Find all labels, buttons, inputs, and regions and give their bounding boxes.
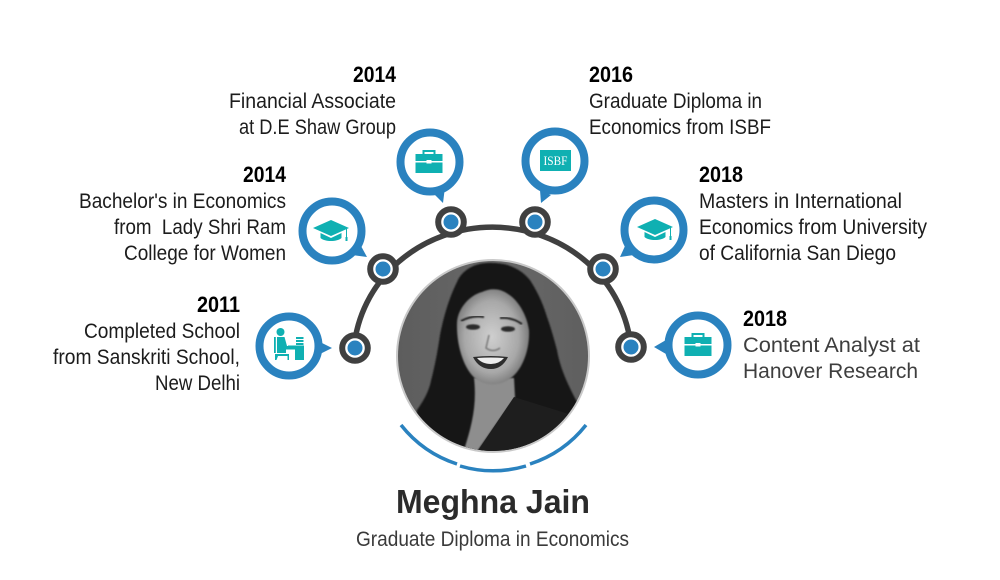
name heading: Meghna Jain [396,483,590,520]
text: 2016 diploma: Economics from ISBF [589,115,771,139]
text: 2018 analyst: Content Analyst at [743,334,920,357]
text: 2011 school: New Delhi [155,371,240,395]
text: 2014 associate [229,62,397,139]
icon bubble: graduation cap left [302,202,367,260]
icon bubble: briefcase left [400,132,460,203]
portrait photo [396,259,590,453]
node: 2011 [342,335,368,361]
node: 2014 associate [438,209,464,235]
icon bubble: ISBF logo [526,132,584,203]
text: 2018 analyst [743,306,920,383]
timeline arc [354,227,631,348]
text: 2011 school: Completed School [84,319,240,343]
text: 2014 bachelor's: 2014 [243,162,287,187]
icon bubble: ISBF logo: ISBF [544,153,568,168]
subtitle: Graduate Diploma in Economics [356,528,629,551]
text: 2016 diploma [589,62,771,139]
node: 2014 bachelor's [370,256,396,282]
text: 2018 analyst: 2018 [743,306,787,331]
icon bubble: graduation cap right [620,200,684,260]
text: 2011 school [53,292,240,395]
text: 2014 bachelor's [79,162,287,265]
text: 2016 diploma: 2016 [589,62,633,87]
text: 2014 bachelor's: from Lady Shri Ram [114,215,286,239]
icon bubble: briefcase right [654,316,728,374]
text: 2014 bachelor's: Bachelor's in Economics [79,189,286,213]
node: 2016 [522,209,548,235]
text: 2018 masters: Economics from University [699,215,927,239]
text: 2014 bachelor's: College for Women [124,241,286,265]
text: 2018 analyst: Hanover Research [743,360,918,383]
text: 2014 associate: at D.E Shaw Group [239,115,396,139]
text: 2014 associate: 2014 [353,62,397,87]
text: 2011 school: 2011 [197,292,240,317]
text: 2018 masters: 2018 [699,162,743,187]
text: 2011 school: from Sanskriti School, [53,345,240,369]
text: 2018 masters: of California San Diego [699,241,896,265]
text: 2018 masters [699,162,927,265]
icon bubble: school desk [260,316,332,376]
node: 2018 analyst [618,334,644,360]
text: 2014 associate: Financial Associate [229,89,396,113]
text: 2016 diploma: Graduate Diploma in [589,89,762,113]
node: 2018 masters [590,256,616,282]
text: 2018 masters: Masters in International [699,189,902,213]
decorative blue arc under portrait [401,425,586,471]
